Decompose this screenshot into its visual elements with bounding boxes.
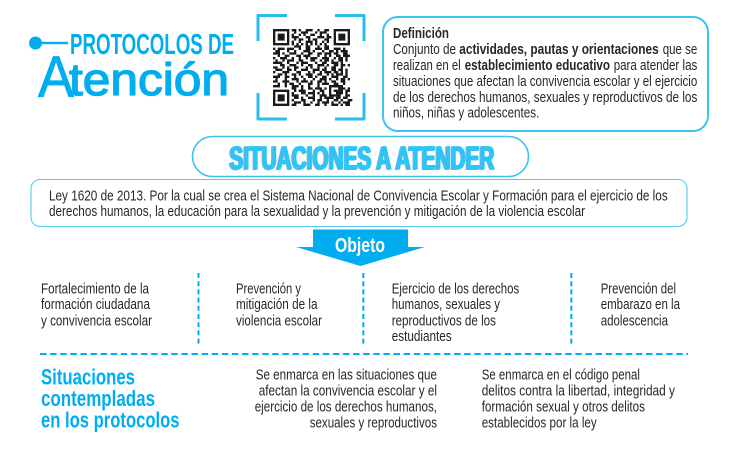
objetivo 1: formación ciudadana	[41, 297, 151, 313]
heading: situaciones contempladas: en los protocolos	[41, 407, 180, 432]
definición text: para atender las	[614, 58, 697, 74]
objetivo 2	[236, 281, 322, 329]
QR matrix	[273, 29, 352, 106]
text: convivencia escolar: afectan la convivencia escolar y el	[259, 383, 437, 399]
title script: Atención: tención	[69, 54, 229, 105]
icon: dot and connector line	[29, 36, 68, 50]
text: convivencia escolar: ejercicio de los derechos humanos,	[255, 399, 437, 415]
heading pill: situaciones a atender	[192, 136, 528, 176]
objetivo 4	[601, 281, 681, 329]
objetivo 2: violencia escolar	[236, 313, 322, 329]
text: código penal: establecidos por la ley	[482, 415, 597, 431]
objetivo 3	[392, 281, 519, 345]
objetivo 4: Prevención del	[601, 281, 676, 297]
objetivos: column separators	[198, 273, 571, 346]
objetivo 4: adolescencia	[601, 313, 669, 329]
heading: situaciones contempladas	[41, 364, 180, 432]
pill outline	[192, 136, 528, 176]
definición text: que se	[663, 42, 697, 58]
heading shadow and text: SITUACIONES A ATENDER	[230, 140, 495, 176]
text: código penal: Se enmarca en el código penal	[482, 367, 640, 383]
arrow shape	[296, 230, 425, 266]
definición text: actividades, pautas y orientaciones	[459, 42, 659, 58]
panel: definición	[383, 17, 708, 131]
objetivo 4: embarazo en la	[601, 297, 681, 313]
ley text	[49, 189, 668, 220]
objetivo 3: Ejercicio de los derechos	[392, 281, 519, 297]
objetivo 1: Fortalecimiento de la	[41, 281, 150, 297]
title line: Protocolos de: PROTOCOLOS DE	[70, 29, 234, 61]
title: Protocolos de Atención	[29, 29, 234, 110]
arrow label: Objeto	[335, 235, 385, 257]
objetivo 2: mitigación de la	[236, 297, 318, 313]
text: convivencia escolar: Se enmarca en las situaciones que	[256, 367, 437, 383]
title script: Atención	[38, 45, 229, 110]
QR code with corner brackets	[258, 16, 364, 119]
panel: ley 1620	[31, 180, 687, 226]
definición text: establecimiento educativo	[465, 58, 610, 74]
objetivo 1: y convivencia escolar	[41, 313, 152, 329]
objetivo 3: estudiantes	[392, 329, 452, 345]
text: código penal	[482, 367, 676, 431]
definición heading: Definición	[393, 26, 449, 42]
arrow: objeto	[296, 230, 425, 266]
heading: situaciones contempladas: contempladas	[41, 386, 155, 411]
text: código penal: formación sexual y otros delitos	[482, 399, 645, 415]
definición text: Conjunto de	[393, 42, 456, 58]
title script: Atención: A	[38, 45, 74, 110]
definición text	[393, 42, 697, 122]
objetivo 3: reproductivos de los	[392, 313, 496, 329]
heading shadow and text: SITUACIONES A ATENDER	[228, 140, 494, 176]
definición text: realizan en el	[393, 58, 461, 74]
definición text: niños, niñas y adolescentes.	[393, 106, 539, 122]
ley box	[31, 180, 687, 226]
corner brackets	[258, 16, 364, 119]
definición box	[383, 17, 708, 131]
objetivo 2: Prevención y	[236, 281, 302, 297]
objetivo 3: humanos, sexuales y	[392, 297, 501, 313]
ley text: derechos humanos, la educación para la sexualidad y la prevención y mitigación de la violencia escolar	[49, 204, 585, 220]
heading: situaciones contempladas: Situaciones	[41, 364, 135, 389]
text: convivencia escolar	[255, 367, 437, 431]
objetivo 1	[41, 281, 152, 329]
heading shadow and text	[228, 140, 495, 176]
text: convivencia escolar: sexuales y reproductivos	[310, 415, 437, 431]
text: código penal: delitos contra la libertad, integridad y	[482, 383, 676, 399]
